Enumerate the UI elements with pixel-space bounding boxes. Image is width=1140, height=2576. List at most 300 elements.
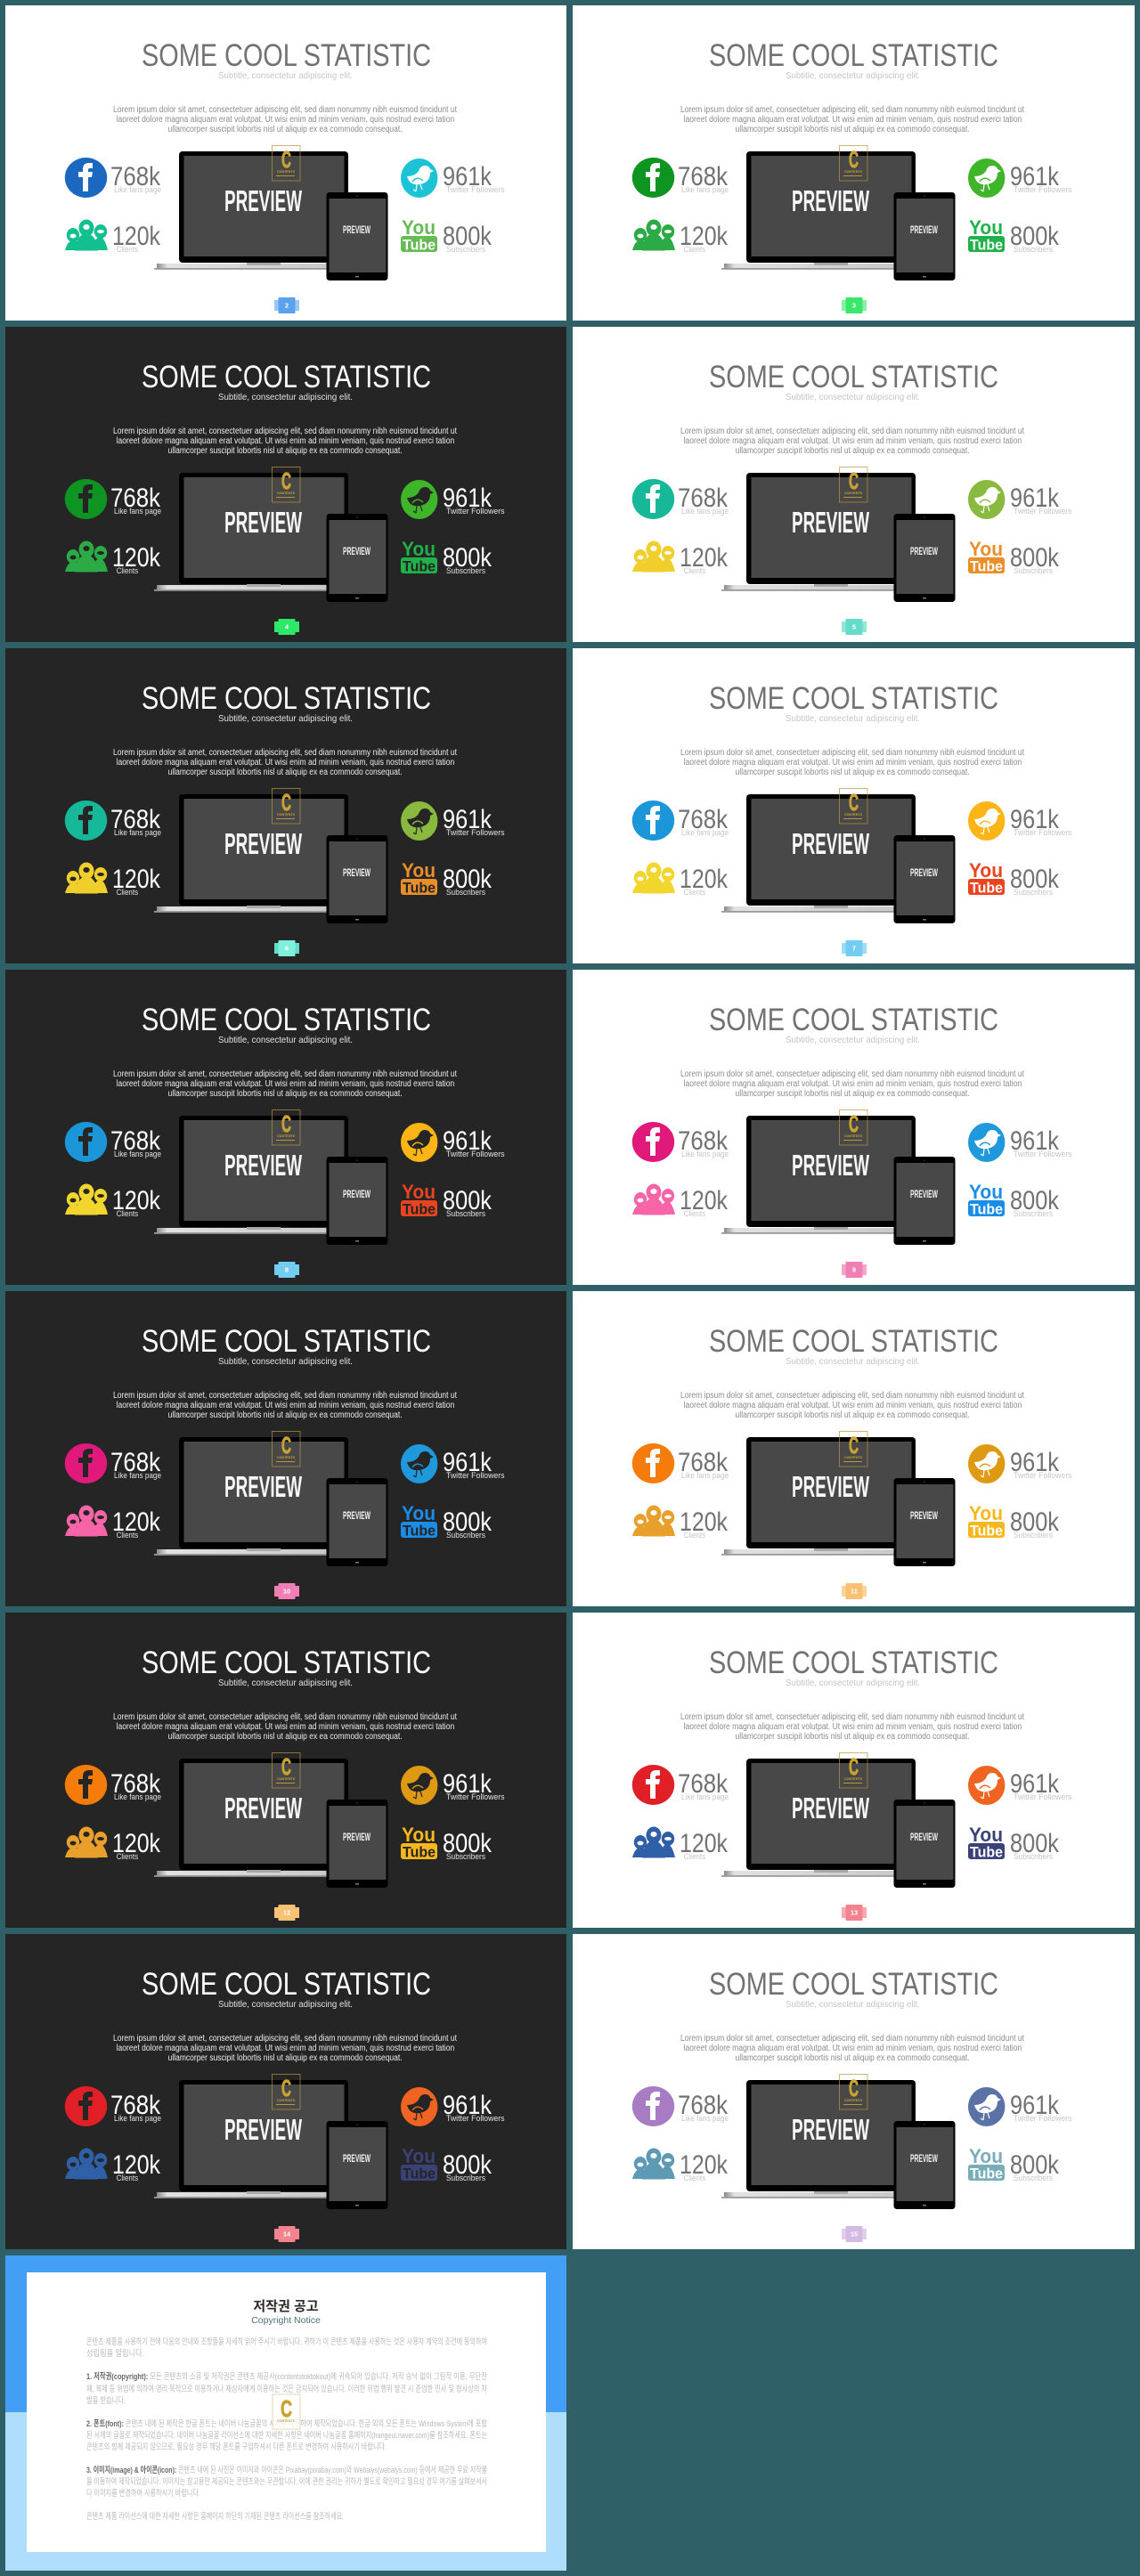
stat: likes: Like fans page	[114, 1471, 161, 1481]
body text	[680, 1391, 1024, 1420]
stat: likes: Like fans page	[681, 507, 729, 516]
slide 14	[5, 1934, 566, 2249]
device: laptop	[154, 2080, 348, 2198]
stat: followers: 961k	[443, 805, 493, 834]
icon: facebook	[632, 2086, 674, 2126]
title: SOME COOL STATISTIC	[709, 1645, 998, 1680]
stat: followers: Twitter Followers	[1014, 507, 1072, 516]
stat: likes: Like fans page	[681, 185, 729, 195]
stat: clients: 120k	[680, 543, 729, 573]
body text: ullamcorper suscipit lobortis nisl ut aliquip ex ea commodo consequat.	[168, 768, 403, 777]
logo: C	[849, 2075, 859, 2101]
icon: twitter bird	[401, 801, 437, 841]
body text: laoreet dolore magna aliquam erat volutpat. Ut wisi enim ad minim veniam, quis nostrud exerci tation	[117, 115, 454, 125]
icon: youtube: Tube	[403, 1843, 436, 1861]
icon: twitter bird	[968, 158, 1005, 198]
stat: subscribers: Subscribers	[446, 566, 485, 576]
icon: youtube	[968, 538, 1005, 575]
device: laptop: PREVIEW	[792, 827, 869, 860]
icon: youtube: Tube	[403, 557, 436, 575]
device: tablet: PREVIEW	[910, 223, 938, 236]
subtitle: Subtitle, consectetur adipiscing elit.	[786, 1999, 920, 2010]
body text: ullamcorper suscipit lobortis nisl ut aliquip ex ea commodo consequat.	[168, 1410, 403, 1420]
device: laptop	[154, 794, 348, 913]
body text	[113, 105, 457, 134]
notice body: 콘텐츠의 함께 제공되지 않으므로, 필요성 경우 해당 폰트를 구입하셔서 다른 폰트로 변경하여 사용하시기 바랍니다.	[86, 2442, 387, 2452]
body text: ullamcorper suscipit lobortis nisl ut aliquip ex ea commodo consequat.	[168, 125, 403, 134]
subtitle: Subtitle, consectetur adipiscing elit.	[218, 1999, 353, 2010]
subtitle: Subtitle, consectetur adipiscing elit.	[218, 70, 353, 81]
icon: youtube: You	[969, 538, 1003, 560]
stat: clients: Clients	[117, 1852, 138, 1862]
device: tablet: PREVIEW	[910, 1509, 938, 1522]
device: laptop	[721, 1116, 916, 1234]
stat: likes: 768k	[110, 484, 161, 513]
icon: clients	[632, 2148, 675, 2180]
icon: twitter bird	[968, 1766, 1005, 1805]
stat: clients: 120k	[112, 865, 161, 894]
stat: clients: 120k	[112, 2150, 161, 2180]
stat: likes: 768k	[110, 1448, 161, 1477]
stat: followers: Twitter Followers	[446, 507, 505, 516]
body text	[680, 427, 1024, 456]
icon: youtube	[401, 2145, 437, 2182]
icon: youtube	[401, 216, 437, 253]
title: SOME COOL STATISTIC	[709, 1323, 998, 1359]
logo	[273, 789, 300, 824]
stat: subscribers: 800k	[443, 1829, 493, 1858]
logo: C	[849, 789, 859, 816]
title: SOME COOL STATISTIC	[142, 1645, 431, 1680]
device: laptop	[154, 151, 348, 270]
subtitle: Subtitle, consectetur adipiscing elit.	[786, 713, 920, 724]
body text: ullamcorper suscipit lobortis nisl ut aliquip ex ea commodo consequat.	[168, 1732, 403, 1742]
stat: subscribers: Subscribers	[446, 888, 485, 898]
logo	[839, 789, 867, 824]
subtitle: Subtitle, consectetur adipiscing elit.	[218, 713, 353, 724]
icon: facebook	[632, 479, 674, 519]
notice body: 1. 저작권(copyright): 모든 콘텐츠의 소유 및 저작권은 콘텐츠 제공사(contentstoktokout)에 귀속되어 있습니다. 저작 승낙 없이 그림적 이용, 무단전	[86, 2371, 487, 2382]
device: tablet	[326, 1478, 388, 1566]
stat: subscribers: Subscribers	[1014, 888, 1053, 898]
icon: youtube: Tube	[403, 237, 436, 253]
device: laptop: PREVIEW	[792, 2113, 869, 2146]
device: laptop: PREVIEW	[224, 1149, 302, 1182]
slide 5	[573, 327, 1135, 642]
body text	[680, 1069, 1024, 1099]
icon: youtube: You	[402, 538, 436, 560]
stat: likes: Like fans page	[681, 1471, 729, 1481]
icon: clients	[632, 1505, 675, 1537]
notice body: 을 이용하여 제작되었습니다. 이미지는 참고용만 제공되는 콘텐츠와는 무관합니다. 이에 관한 권리는 귀하가 별도로 확인하고 필요성 경우 여기를 살펴보셔서	[86, 2476, 487, 2487]
icon: youtube: You	[969, 1502, 1003, 1524]
page badge	[842, 1262, 867, 1278]
stat: subscribers: Subscribers	[1014, 2174, 1053, 2183]
icon: clients	[65, 862, 108, 894]
logo: C	[281, 789, 291, 816]
body text: Lorem ipsum dolor sit amet, consectetuer adipiscing elit, sed diam nonummy nibh euismod tincidunt ut	[680, 748, 1024, 758]
notice body: 3. 이미지(image) & 아이콘(icon): 콘텐츠 내에 된 사진은 이미지와 아이콘은 Pixabay(pixabay.com)와 Webalys(webalys.com) 등에서 제공한 무료 저작물	[86, 2465, 487, 2475]
device: tablet	[326, 835, 388, 923]
device: tablet: PREVIEW	[910, 2152, 938, 2165]
device: tablet: PREVIEW	[910, 1188, 938, 1200]
stat: subscribers: Subscribers	[446, 2174, 485, 2183]
page badge	[842, 297, 867, 313]
stat: likes: 768k	[678, 162, 729, 191]
icon: twitter bird	[968, 1444, 1005, 1483]
stat: clients: Clients	[684, 888, 705, 898]
stat: likes: Like fans page	[114, 1792, 161, 1802]
body text: ullamcorper suscipit lobortis nisl ut aliquip ex ea commodo consequat.	[736, 2053, 970, 2063]
body text: Lorem ipsum dolor sit amet, consectetuer adipiscing elit, sed diam nonummy nibh euismod tincidunt ut	[680, 1712, 1024, 1722]
logo: C	[849, 467, 859, 494]
slide 6	[5, 648, 566, 963]
icon: youtube	[968, 859, 1005, 896]
icon: twitter bird	[401, 1123, 437, 1162]
subtitle: Subtitle, consectetur adipiscing elit.	[786, 70, 920, 81]
body text: laoreet dolore magna aliquam erat volutpat. Ut wisi enim ad minim veniam, quis nostrud exerci tation	[684, 1401, 1022, 1410]
logo	[273, 1752, 300, 1788]
stat: clients: 120k	[112, 1507, 161, 1537]
body text: Lorem ipsum dolor sit amet, consectetuer adipiscing elit, sed diam nonummy nibh euismod tincidunt ut	[113, 105, 457, 115]
icon: clients	[65, 1827, 108, 1857]
device: laptop: PREVIEW	[224, 1470, 302, 1503]
page badge	[842, 1905, 867, 1921]
body text: laoreet dolore magna aliquam erat volutpat. Ut wisi enim ad minim veniam, quis nostrud exerci tation	[117, 1722, 454, 1732]
stat: followers: 961k	[1010, 1448, 1060, 1477]
body text: ullamcorper suscipit lobortis nisl ut aliquip ex ea commodo consequat.	[736, 446, 970, 456]
icon: youtube: You	[969, 1824, 1003, 1846]
stat: followers: 961k	[443, 1769, 493, 1799]
body text: laoreet dolore magna aliquam erat volutpat. Ut wisi enim ad minim veniam, quis nostrud exerci tation	[684, 115, 1022, 125]
notice body: 성립됨을 알립니다.	[86, 2348, 144, 2359]
icon: youtube: You	[402, 216, 436, 239]
page badge	[842, 619, 867, 635]
body text: laoreet dolore magna aliquam erat volutpat. Ut wisi enim ad minim veniam, quis nostrud exerci tation	[684, 2044, 1022, 2053]
logo: CONTENTS	[844, 169, 862, 174]
stat: subscribers: Subscribers	[1014, 245, 1053, 255]
logo: C	[281, 2075, 291, 2101]
logo	[839, 1109, 867, 1145]
icon: youtube: Tube	[970, 557, 1003, 575]
icon: youtube: Tube	[970, 1200, 1003, 1218]
stat: likes: 768k	[110, 162, 161, 191]
icon: twitter bird	[968, 801, 1005, 841]
device: tablet	[326, 2121, 388, 2209]
stat: likes: Like fans page	[114, 185, 161, 195]
stat: clients: Clients	[684, 2174, 705, 2183]
icon: facebook	[632, 1765, 674, 1805]
icon: facebook	[65, 1765, 107, 1805]
icon: clients	[65, 541, 108, 572]
subtitle: Subtitle, consectetur adipiscing elit.	[218, 1035, 353, 1045]
icon: clients	[65, 1505, 108, 1537]
body text: Lorem ipsum dolor sit amet, consectetuer adipiscing elit, sed diam nonummy nibh euismod tincidunt ut	[680, 1069, 1024, 1079]
icon: youtube	[968, 1502, 1005, 1539]
icon: youtube: You	[969, 859, 1003, 882]
icon: youtube: Tube	[970, 237, 1003, 253]
body text	[680, 2034, 1024, 2063]
logo: C	[849, 146, 859, 173]
body text	[113, 427, 457, 456]
stat: likes: Like fans page	[681, 1792, 729, 1802]
device: tablet: PREVIEW	[343, 1188, 370, 1200]
logo: CONTENTS	[277, 2098, 295, 2102]
logo: C	[281, 2395, 292, 2422]
page badge: 15	[851, 2230, 858, 2239]
body text: laoreet dolore magna aliquam erat volutpat. Ut wisi enim ad minim veniam, quis nostrud exerci tation	[117, 436, 454, 446]
page badge	[274, 1583, 299, 1599]
stat: followers: Twitter Followers	[446, 2114, 505, 2124]
stat: clients: 120k	[680, 2150, 729, 2180]
slide 10	[5, 1291, 566, 1606]
notice body	[86, 2336, 487, 2522]
device: laptop	[721, 2080, 916, 2198]
icon: twitter bird	[401, 1766, 437, 1805]
icon: youtube	[401, 859, 437, 896]
device: laptop	[154, 1116, 348, 1234]
notice body: 벌을 받습니다.	[86, 2396, 126, 2406]
device: tablet	[894, 1800, 955, 1888]
device: tablet: PREVIEW	[910, 1831, 938, 1843]
stat: likes: Like fans page	[681, 1150, 729, 1159]
page badge	[274, 1905, 299, 1921]
page badge	[274, 619, 299, 635]
stat: likes: Like fans page	[114, 507, 161, 516]
body text	[113, 748, 457, 777]
slide 9	[573, 970, 1135, 1285]
stat: subscribers: Subscribers	[446, 245, 485, 255]
body text: laoreet dolore magna aliquam erat volutpat. Ut wisi enim ad minim veniam, quis nostrud exerci tation	[117, 2044, 454, 2053]
body text: Lorem ipsum dolor sit amet, consectetuer adipiscing elit, sed diam nonummy nibh euismod tincidunt ut	[113, 1391, 457, 1401]
device: laptop	[721, 1759, 916, 1877]
body text: Lorem ipsum dolor sit amet, consectetuer adipiscing elit, sed diam nonummy nibh euismod tincidunt ut	[113, 2034, 457, 2044]
body text: laoreet dolore magna aliquam erat volutpat. Ut wisi enim ad minim veniam, quis nostrud exerci tation	[684, 1722, 1022, 1732]
stat: subscribers: Subscribers	[1014, 1852, 1053, 1862]
stat: subscribers: Subscribers	[1014, 1209, 1053, 1219]
logo: CONTENTS	[844, 812, 862, 817]
stat: likes: Like fans page	[114, 828, 161, 838]
body text	[680, 748, 1024, 777]
icon: youtube: Tube	[403, 1523, 436, 1539]
logo: CONTENTS	[844, 2098, 862, 2102]
body text	[113, 2034, 457, 2063]
body text: Lorem ipsum dolor sit amet, consectetuer adipiscing elit, sed diam nonummy nibh euismod tincidunt ut	[113, 427, 457, 436]
logo	[839, 146, 867, 181]
body text: ullamcorper suscipit lobortis nisl ut aliquip ex ea commodo consequat.	[168, 446, 403, 456]
logo: C	[849, 1753, 859, 1780]
page badge: 2	[285, 301, 289, 310]
icon: twitter bird	[401, 158, 437, 198]
stat: likes: 768k	[678, 1126, 729, 1156]
stat: followers: 961k	[1010, 162, 1060, 191]
slide 13	[573, 1613, 1135, 1928]
stat: subscribers: Subscribers	[1014, 1531, 1053, 1540]
subtitle: Subtitle, consectetur adipiscing elit.	[786, 1356, 920, 1367]
icon: youtube	[968, 1824, 1005, 1861]
logo	[273, 2075, 300, 2109]
icon: youtube: You	[402, 2145, 436, 2167]
logo: C	[281, 1432, 291, 1459]
title: SOME COOL STATISTIC	[709, 1002, 998, 1037]
stat: likes: 768k	[678, 2091, 729, 2120]
device: laptop	[154, 1759, 348, 1877]
icon: youtube	[968, 2145, 1005, 2182]
icon: clients	[632, 862, 675, 894]
page badge	[274, 297, 299, 313]
page badge: 6	[285, 944, 289, 953]
page badge: 12	[283, 1909, 290, 1916]
stat: clients: Clients	[684, 245, 705, 255]
title: SOME COOL STATISTIC	[709, 1966, 998, 2002]
stat: subscribers: Subscribers	[446, 1852, 485, 1862]
icon: facebook	[632, 800, 674, 841]
logo: CONTENTS	[277, 1776, 295, 1781]
stat: subscribers: 800k	[443, 222, 493, 251]
body text: Lorem ipsum dolor sit amet, consectetuer adipiscing elit, sed diam nonummy nibh euismod tincidunt ut	[680, 105, 1024, 115]
stat: followers: 961k	[443, 1126, 493, 1156]
stat: subscribers: 800k	[443, 865, 493, 894]
slide 2	[5, 5, 566, 321]
stat: likes: 768k	[678, 1448, 729, 1477]
subtitle: Subtitle, consectetur adipiscing elit.	[218, 1356, 353, 1367]
device: tablet: PREVIEW	[343, 545, 370, 557]
icon: twitter bird	[401, 480, 437, 519]
stat: likes: 768k	[678, 805, 729, 834]
title: SOME COOL STATISTIC	[142, 359, 431, 394]
body text: Lorem ipsum dolor sit amet, consectetuer adipiscing elit, sed diam nonummy nibh euismod tincidunt ut	[680, 1391, 1024, 1401]
subtitle: Subtitle, consectetur adipiscing elit.	[786, 1678, 920, 1688]
title: SOME COOL STATISTIC	[142, 1323, 431, 1359]
stat: clients: Clients	[117, 1209, 138, 1219]
logo: CONTENTS	[844, 1455, 862, 1459]
page badge: 5	[852, 623, 856, 630]
device: tablet: PREVIEW	[910, 866, 938, 879]
logo: CONTENTS	[277, 812, 295, 817]
stat: likes: 768k	[678, 1769, 729, 1799]
panel: copyright notice	[5, 2255, 566, 2571]
body text: laoreet dolore magna aliquam erat volutpat. Ut wisi enim ad minim veniam, quis nostrud exerci tation	[117, 1401, 454, 1410]
stat: clients: 120k	[112, 222, 161, 251]
icon: facebook	[65, 2086, 107, 2126]
page badge: 13	[851, 1909, 858, 1916]
logo	[273, 467, 300, 502]
body text: laoreet dolore magna aliquam erat volutpat. Ut wisi enim ad minim veniam, quis nostrud exerci tation	[684, 758, 1022, 768]
device: laptop	[721, 794, 916, 913]
logo	[273, 1109, 300, 1145]
icon: youtube	[401, 1181, 437, 1218]
device: tablet	[326, 192, 388, 280]
device: laptop: PREVIEW	[224, 184, 302, 217]
page badge: 4	[285, 623, 289, 630]
page badge: 10	[283, 1587, 290, 1596]
device: laptop: PREVIEW	[792, 1149, 869, 1182]
device: laptop: PREVIEW	[792, 506, 869, 539]
icon: youtube	[968, 1181, 1005, 1218]
stat: clients: 120k	[680, 865, 729, 894]
slide 4	[5, 327, 566, 642]
logo	[839, 2075, 867, 2109]
body text: laoreet dolore magna aliquam erat volutpat. Ut wisi enim ad minim veniam, quis nostrud exerci tation	[117, 758, 454, 768]
icon: youtube: Tube	[403, 1200, 436, 1218]
notice body: 재, 복제 등 위법에 의하여 영리 목적으로 이용하거나 제삼자에게 이용하는 것은 금지되어 있습니다. 이러한 위법 행위 발견 시 준엄한 민사 및 형사상의 처	[86, 2384, 487, 2394]
icon: twitter bird	[968, 480, 1005, 519]
stat: followers: Twitter Followers	[446, 828, 505, 838]
icon: facebook	[65, 1443, 107, 1483]
stat: subscribers: Subscribers	[446, 1531, 485, 1540]
body text: Lorem ipsum dolor sit amet, consectetuer adipiscing elit, sed diam nonummy nibh euismod tincidunt ut	[680, 427, 1024, 436]
device: laptop: PREVIEW	[224, 1792, 302, 1824]
stat: clients: Clients	[684, 1209, 705, 1219]
device: tablet	[326, 1157, 388, 1245]
stat: likes: Like fans page	[681, 828, 729, 838]
logo: C	[281, 467, 291, 494]
logo	[273, 2394, 300, 2429]
body text: ullamcorper suscipit lobortis nisl ut aliquip ex ea commodo consequat.	[736, 1732, 970, 1742]
logo: CONTENTS	[844, 1776, 862, 1781]
device: laptop	[721, 151, 916, 270]
slide 3	[573, 5, 1135, 321]
page badge: 14	[283, 2230, 291, 2239]
device: laptop: PREVIEW	[224, 506, 302, 539]
body text: laoreet dolore magna aliquam erat volutpat. Ut wisi enim ad minim veniam, quis nostrud exerci tation	[684, 436, 1022, 446]
icon: youtube: You	[969, 1181, 1003, 1203]
stat: clients: 120k	[680, 1829, 729, 1858]
stat: likes: 768k	[110, 1769, 161, 1799]
icon: twitter bird	[968, 1123, 1005, 1162]
stat: followers: Twitter Followers	[446, 1792, 505, 1802]
page badge: 7	[852, 944, 856, 953]
logo: C	[849, 1432, 859, 1459]
stat: followers: 961k	[1010, 2091, 1060, 2120]
stat: followers: 961k	[1010, 484, 1060, 513]
device: laptop	[721, 1437, 916, 1556]
icon: youtube: You	[969, 2145, 1003, 2167]
logo: CONTENTS	[277, 169, 295, 174]
page badge: 11	[851, 1587, 858, 1596]
stat: likes: 768k	[110, 2091, 161, 2120]
body text: Lorem ipsum dolor sit amet, consectetuer adipiscing elit, sed diam nonummy nibh euismod tincidunt ut	[113, 1069, 457, 1079]
icon: facebook	[632, 1122, 674, 1162]
device: laptop: PREVIEW	[224, 2113, 302, 2146]
logo: CONTENTS	[277, 491, 295, 495]
body text: Lorem ipsum dolor sit amet, consectetuer adipiscing elit, sed diam nonummy nibh euismod tincidunt ut	[680, 2034, 1024, 2044]
icon: youtube	[401, 538, 437, 575]
icon: youtube: You	[402, 1824, 436, 1846]
title: SOME COOL STATISTIC	[142, 1002, 431, 1037]
stat: subscribers: Subscribers	[446, 1209, 485, 1219]
logo	[273, 1432, 300, 1467]
notice body: 된 서체의 글꼴로 제작되었습니다. 네이버 나눔글꼴 라이선스에 대한 자세한 사항은 네이버 나눔글꼴 홈페이지(hangeul.naver.com)를 참조하세요. 폰트는	[86, 2430, 487, 2441]
stat: followers: 961k	[443, 162, 493, 191]
stat: clients: 120k	[680, 1507, 729, 1537]
subtitle: Subtitle, consectetur adipiscing elit.	[786, 392, 920, 402]
stat: followers: Twitter Followers	[1014, 2114, 1072, 2124]
stat: clients: 120k	[680, 222, 729, 251]
icon: facebook	[632, 1443, 674, 1483]
device: tablet	[894, 1157, 955, 1245]
device: tablet: PREVIEW	[910, 545, 938, 557]
stat: followers: Twitter Followers	[446, 1471, 505, 1481]
stat: followers: 961k	[1010, 1769, 1060, 1799]
stat: subscribers: 800k	[443, 543, 493, 573]
notice subheading: Copyright Notice	[251, 2315, 321, 2326]
stat: subscribers: 800k	[1010, 865, 1060, 894]
stat: followers: Twitter Followers	[1014, 1792, 1072, 1802]
device: tablet: PREVIEW	[343, 223, 370, 236]
title: SOME COOL STATISTIC	[142, 1966, 431, 2002]
stat: clients: Clients	[117, 566, 138, 576]
